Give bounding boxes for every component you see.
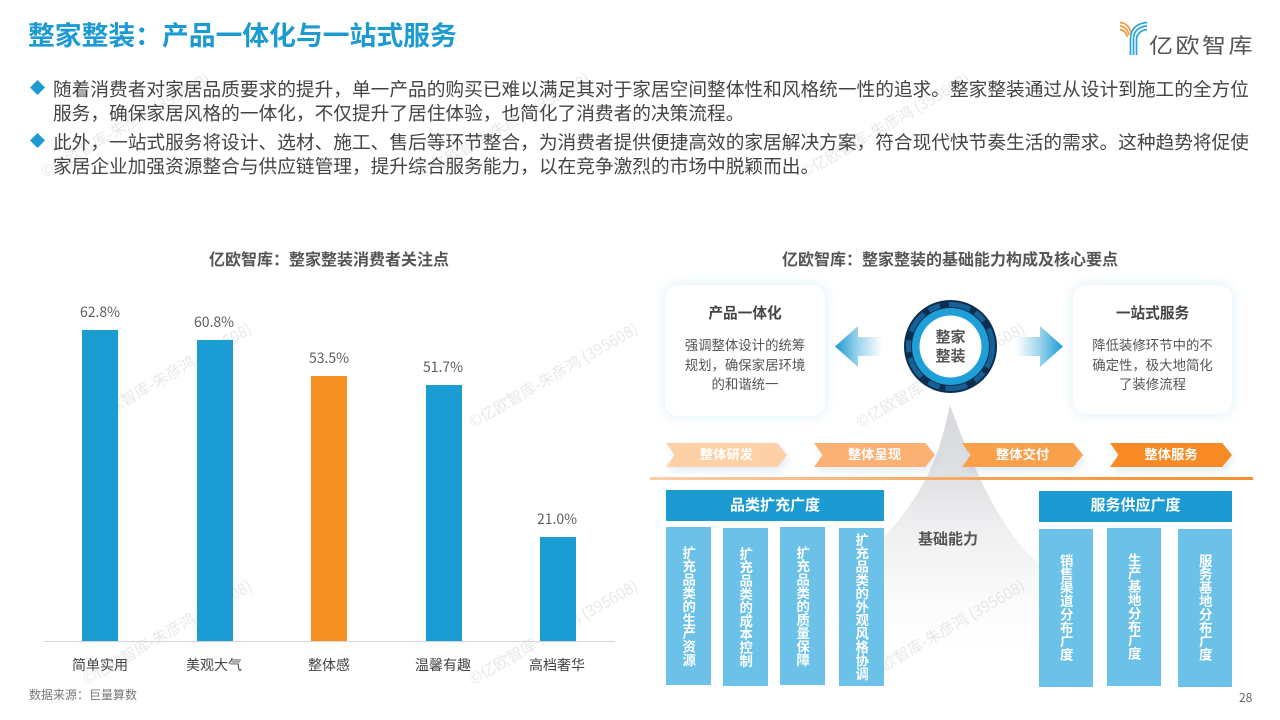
bar: 高档奢华 [529,509,585,675]
paragraph 2: 家居企业加强资源整合与供应链管理，提升综合服务能力，以在竞争激烈的市场中脱颖而出。 [53,152,819,179]
panel: 一站式服务: 降低装修环节中的不 [1092,334,1213,354]
chevron: 整体交付 [962,443,1083,467]
header: 服务供应广度 [1090,494,1180,515]
column 4 [839,528,884,686]
bar chart: 21.0% [537,509,577,529]
chevron: 整体呈现 [814,443,935,467]
logo: 亿欧智库 [1120,22,1255,59]
bullet text 1 [30,75,1249,126]
paragraph 2: 此外，一站式服务将设计、选材、施工、售后等环节整合，为消费者提供便捷高效的家居解决方案，符合现代快节奏生活的需求。这种趋势将促使 [53,128,1249,155]
header [1039,491,1232,522]
bar: 整体感 [308,348,350,675]
column 1: 销售渠道分布广度 [1057,554,1077,662]
bar chart: 简单实用 [72,655,128,675]
panel: 品类扩充广度 [666,490,884,686]
page number: 28 [1239,689,1252,706]
bar chart: 60.8% [194,312,234,332]
bar chart: 51.7% [423,357,463,377]
bar chart [44,302,615,675]
bar: 简单实用 [72,302,128,675]
bar chart: 高档奢华 [529,655,585,675]
watermarks: ©亿欧智库-朱彦鸿 (395608) [851,574,1029,690]
orange divider [650,477,1253,480]
circle label [935,326,966,366]
watermarks: ©亿欧智库-朱彦鸿 (395608) [464,317,642,433]
column 1 [1039,529,1093,687]
title: 整家整装：产品一体化与一站式服务 [28,14,457,53]
chevron: 整体研发 [666,443,787,467]
panel: 产品一体化: 强调整体设计的统筹 [685,334,805,354]
source note: 数据来源：巨量算数 [29,686,137,703]
icon: bullet diamond [30,80,45,95]
watermarks: ©亿欧智库-朱彦鸿 (395608) [78,574,256,690]
header [666,490,884,521]
paragraph 1: 服务，确保家居风格的一体化，不仅提升了居住体验，也简化了消费者的决策流程。 [53,99,744,126]
panel: 一站式服务: 了装修流程 [1119,373,1186,393]
circle label: 整装 [935,345,966,366]
chevron: 整体研发: 整体研发 [700,444,753,463]
column 4: 扩充品类的外观风格协调 [852,533,872,681]
bar chart: 美观大气 [186,655,242,675]
paragraph 2 [53,128,1249,179]
paragraph 1: 随着消费者对家居品质要求的提升，单一产品的购买已难以满足其对于家居空间整体性和风格统一性的追求。整家整装通过从设计到施工的全方位 [53,75,1249,102]
bar chart: 62.8% [80,302,120,322]
column 3: 服务基地分布广度 [1196,554,1216,662]
chevron: 整体服务: 整体服务 [1144,444,1198,463]
watermarks: ©亿欧智库-朱彦鸿 (395608) [464,574,642,690]
circle label: 整家 [935,326,966,347]
bullet text 2 [30,128,1249,179]
logo text: 亿欧智库 [1149,28,1255,59]
column 3 [1178,529,1232,687]
column 1 [666,527,711,685]
panel: 一站式服务: 确定性，极大地简化 [1092,354,1213,374]
heading: left chart: 亿欧智库：整家整装消费者关注点 [209,246,449,270]
bar chart: 整体感 [308,655,350,675]
column 2: 生产基地分布广度 [1125,553,1145,661]
watermarks: ©亿欧智库-朱彦鸿 (395608) [78,317,256,433]
panel: 产品一体化 [665,285,825,416]
panel: 产品一体化: 产品一体化 [708,302,782,323]
chevron: 整体呈现: 整体呈现 [848,444,901,463]
column 3: 扩充品类的质量保障 [793,546,813,666]
watermarks: ©亿欧智库-朱彦鸿 (395608) [36,67,214,183]
icon: logo Y mark [1120,22,1148,55]
icon: bullet diamond [30,133,45,148]
chevron: 整体服务 [1110,443,1232,467]
bar chart: 53.5% [309,348,349,368]
header: 品类扩充广度 [730,494,820,515]
column 2 [1107,528,1161,686]
icon: right arrow [1016,326,1063,367]
watermarks: ©亿欧智库-朱彦鸿 (395608) [851,317,1029,433]
process chevrons [666,443,1234,474]
column 2 [723,528,768,686]
paragraph 1 [53,75,1249,126]
panel: 服务供应广度 [1039,491,1232,687]
column 3 [780,527,825,685]
watermarks: ©亿欧智库-朱彦鸿 (395608) [796,67,974,183]
column 1: 扩充品类的生产资源 [679,546,699,666]
heading: right diagram: 亿欧智库：整家整装的基础能力构成及核心要点 [782,246,1118,270]
panel: 一站式服务: 一站式服务 [1116,302,1189,323]
panel: 产品一体化: 的和谐统一 [712,373,778,393]
watermarks: ©亿欧智库-朱彦鸿 (395608) [416,67,594,183]
chevron: 整体交付: 整体交付 [996,444,1049,463]
label: 基础能力: 基础能力 [918,528,978,549]
icon: left arrow [835,326,880,367]
panel: 产品一体化: 规划，确保家居环境 [685,354,805,374]
central circle: 整家整装 [904,300,997,393]
mountain shape: base capability [884,406,1039,578]
column 2: 扩充品类的成本控制 [736,547,756,667]
bar: 温馨有趣 [415,357,471,675]
bar: 美观大气 [186,312,242,675]
panel: 一站式服务 [1073,285,1232,414]
bar chart: 温馨有趣 [415,655,471,675]
